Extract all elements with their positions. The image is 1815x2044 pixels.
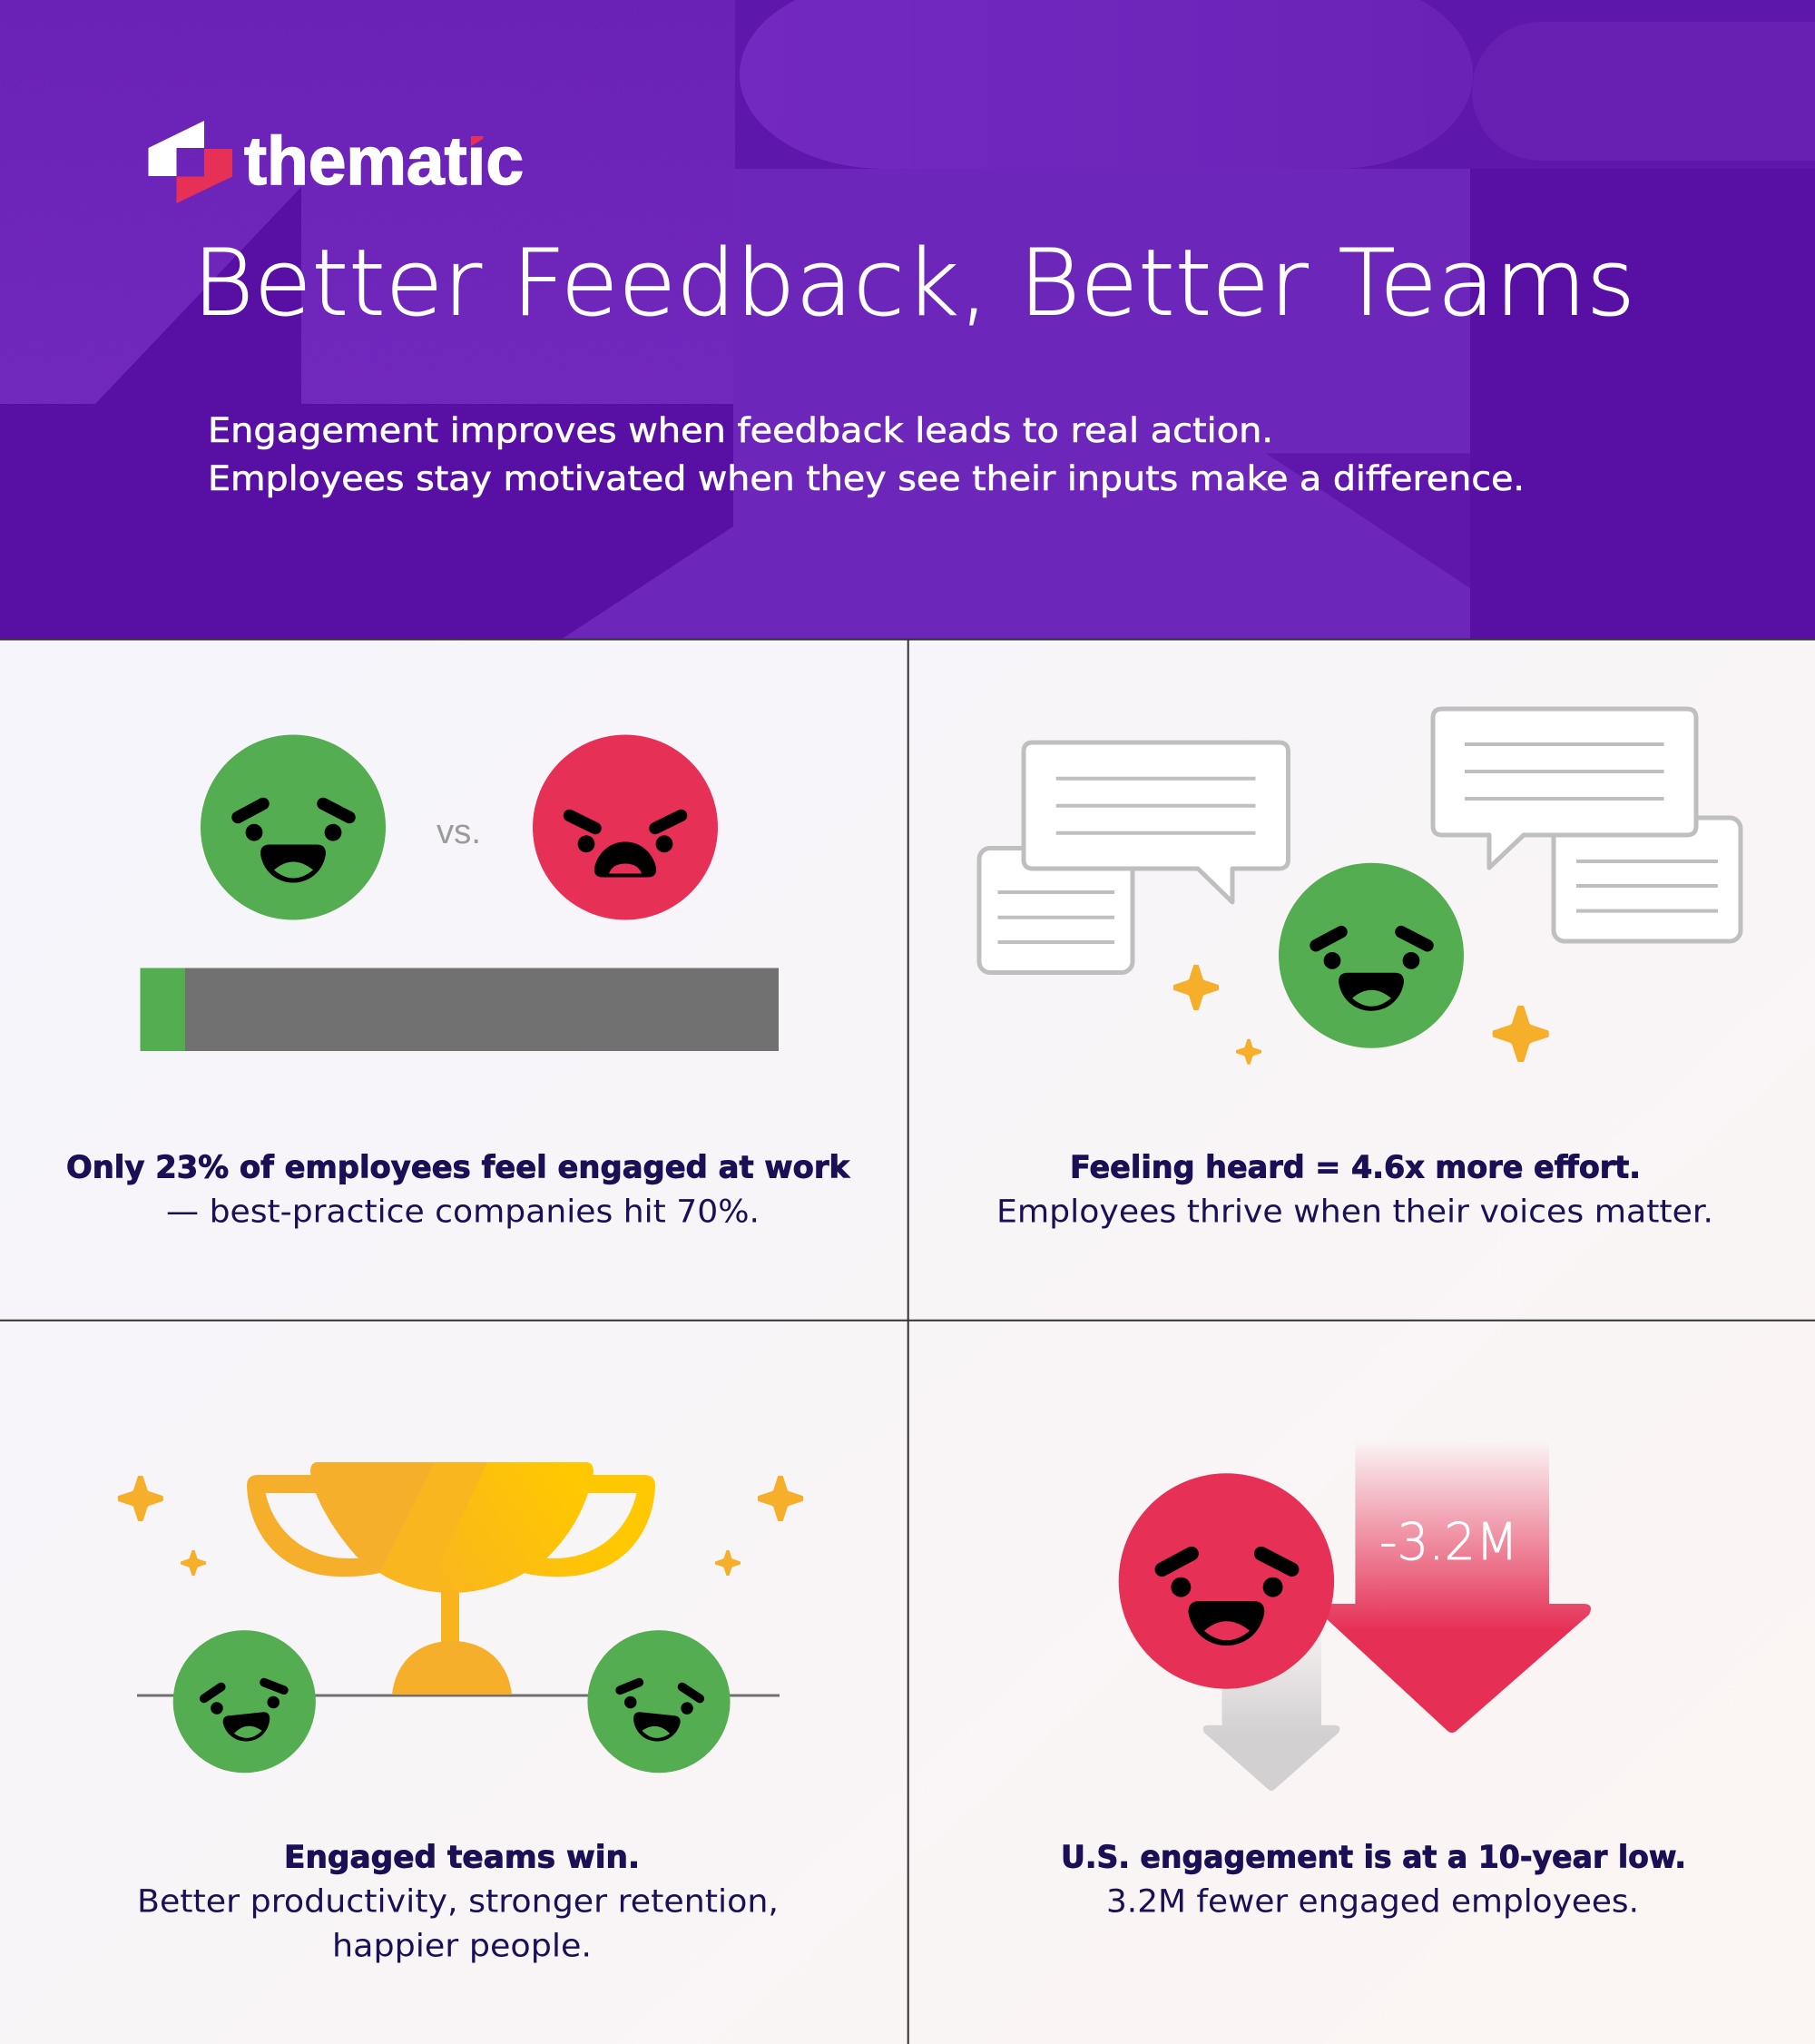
subtitle: Engagement improves when feedback leads to real action. bbox=[208, 411, 1273, 450]
header banner background bbox=[0, 0, 1815, 639]
panel: engagement decline bbox=[1061, 1440, 1686, 1921]
panel dividers bbox=[0, 639, 1815, 2044]
text: feeling heard statistic: Feeling heard = 4.6x more effort. bbox=[1070, 1149, 1641, 1185]
icon: sparkles bbox=[1174, 966, 1547, 1064]
label: minus 3.2M: -3.2M bbox=[1379, 1513, 1518, 1572]
text: feeling heard statistic bbox=[996, 1149, 1713, 1231]
icon: angry red face bbox=[533, 735, 718, 920]
text: engaged teams statement: Engaged teams win. bbox=[284, 1839, 640, 1875]
text: engaged teams statement bbox=[137, 1839, 779, 1964]
text: feeling heard statistic: Employees thrive when their voices matter. bbox=[996, 1194, 1713, 1231]
vs label: vs. bbox=[437, 813, 481, 851]
icon: left happy face bbox=[173, 1630, 316, 1773]
icon: speech documents bbox=[979, 709, 1741, 973]
text: engagement statistic: Only 23% of employees feel engaged at work bbox=[66, 1149, 850, 1185]
text: engagement statistic bbox=[66, 1149, 850, 1231]
icon: happy green face bbox=[1279, 863, 1464, 1048]
text: engagement low statement bbox=[1061, 1839, 1686, 1921]
arrow: large red down arrow bbox=[1313, 1440, 1591, 1733]
bar chart: 23 percent engaged bbox=[140, 968, 779, 1051]
text: engagement statistic: — best-practice companies hit 70%. bbox=[166, 1194, 760, 1231]
panel: feeling heard bbox=[979, 709, 1741, 1231]
subtitle: Employees stay motivated when they see their inputs make a difference. bbox=[208, 459, 1525, 498]
arrow: small grey down arrow bbox=[1203, 1616, 1339, 1791]
panel: engaged teams win bbox=[119, 1452, 802, 1964]
ground line bbox=[137, 1694, 780, 1697]
subtitle bbox=[208, 411, 1525, 498]
title: Better Feedback, Better Teams bbox=[192, 229, 1635, 336]
page background bbox=[0, 639, 1815, 2044]
icon: happy green face bbox=[201, 735, 386, 920]
text: engaged teams statement: happier people. bbox=[332, 1928, 592, 1964]
icon: right happy face bbox=[587, 1630, 731, 1773]
text: engaged teams statement: Better productivity, stronger retention, bbox=[137, 1884, 779, 1921]
logo wordmark: thematic bbox=[244, 123, 524, 199]
panel: engagement comparison bbox=[66, 735, 850, 1231]
icon: thematic logo mark bbox=[149, 121, 232, 203]
text: engagement low statement: U.S. engagement is at a 10-year low. bbox=[1061, 1839, 1686, 1875]
icon: red face bbox=[1119, 1473, 1334, 1689]
icon: sparkles bbox=[119, 1477, 802, 1575]
icon: trophy bbox=[247, 1452, 655, 1695]
text: engagement low statement: 3.2M fewer engaged employees. bbox=[1106, 1884, 1639, 1921]
